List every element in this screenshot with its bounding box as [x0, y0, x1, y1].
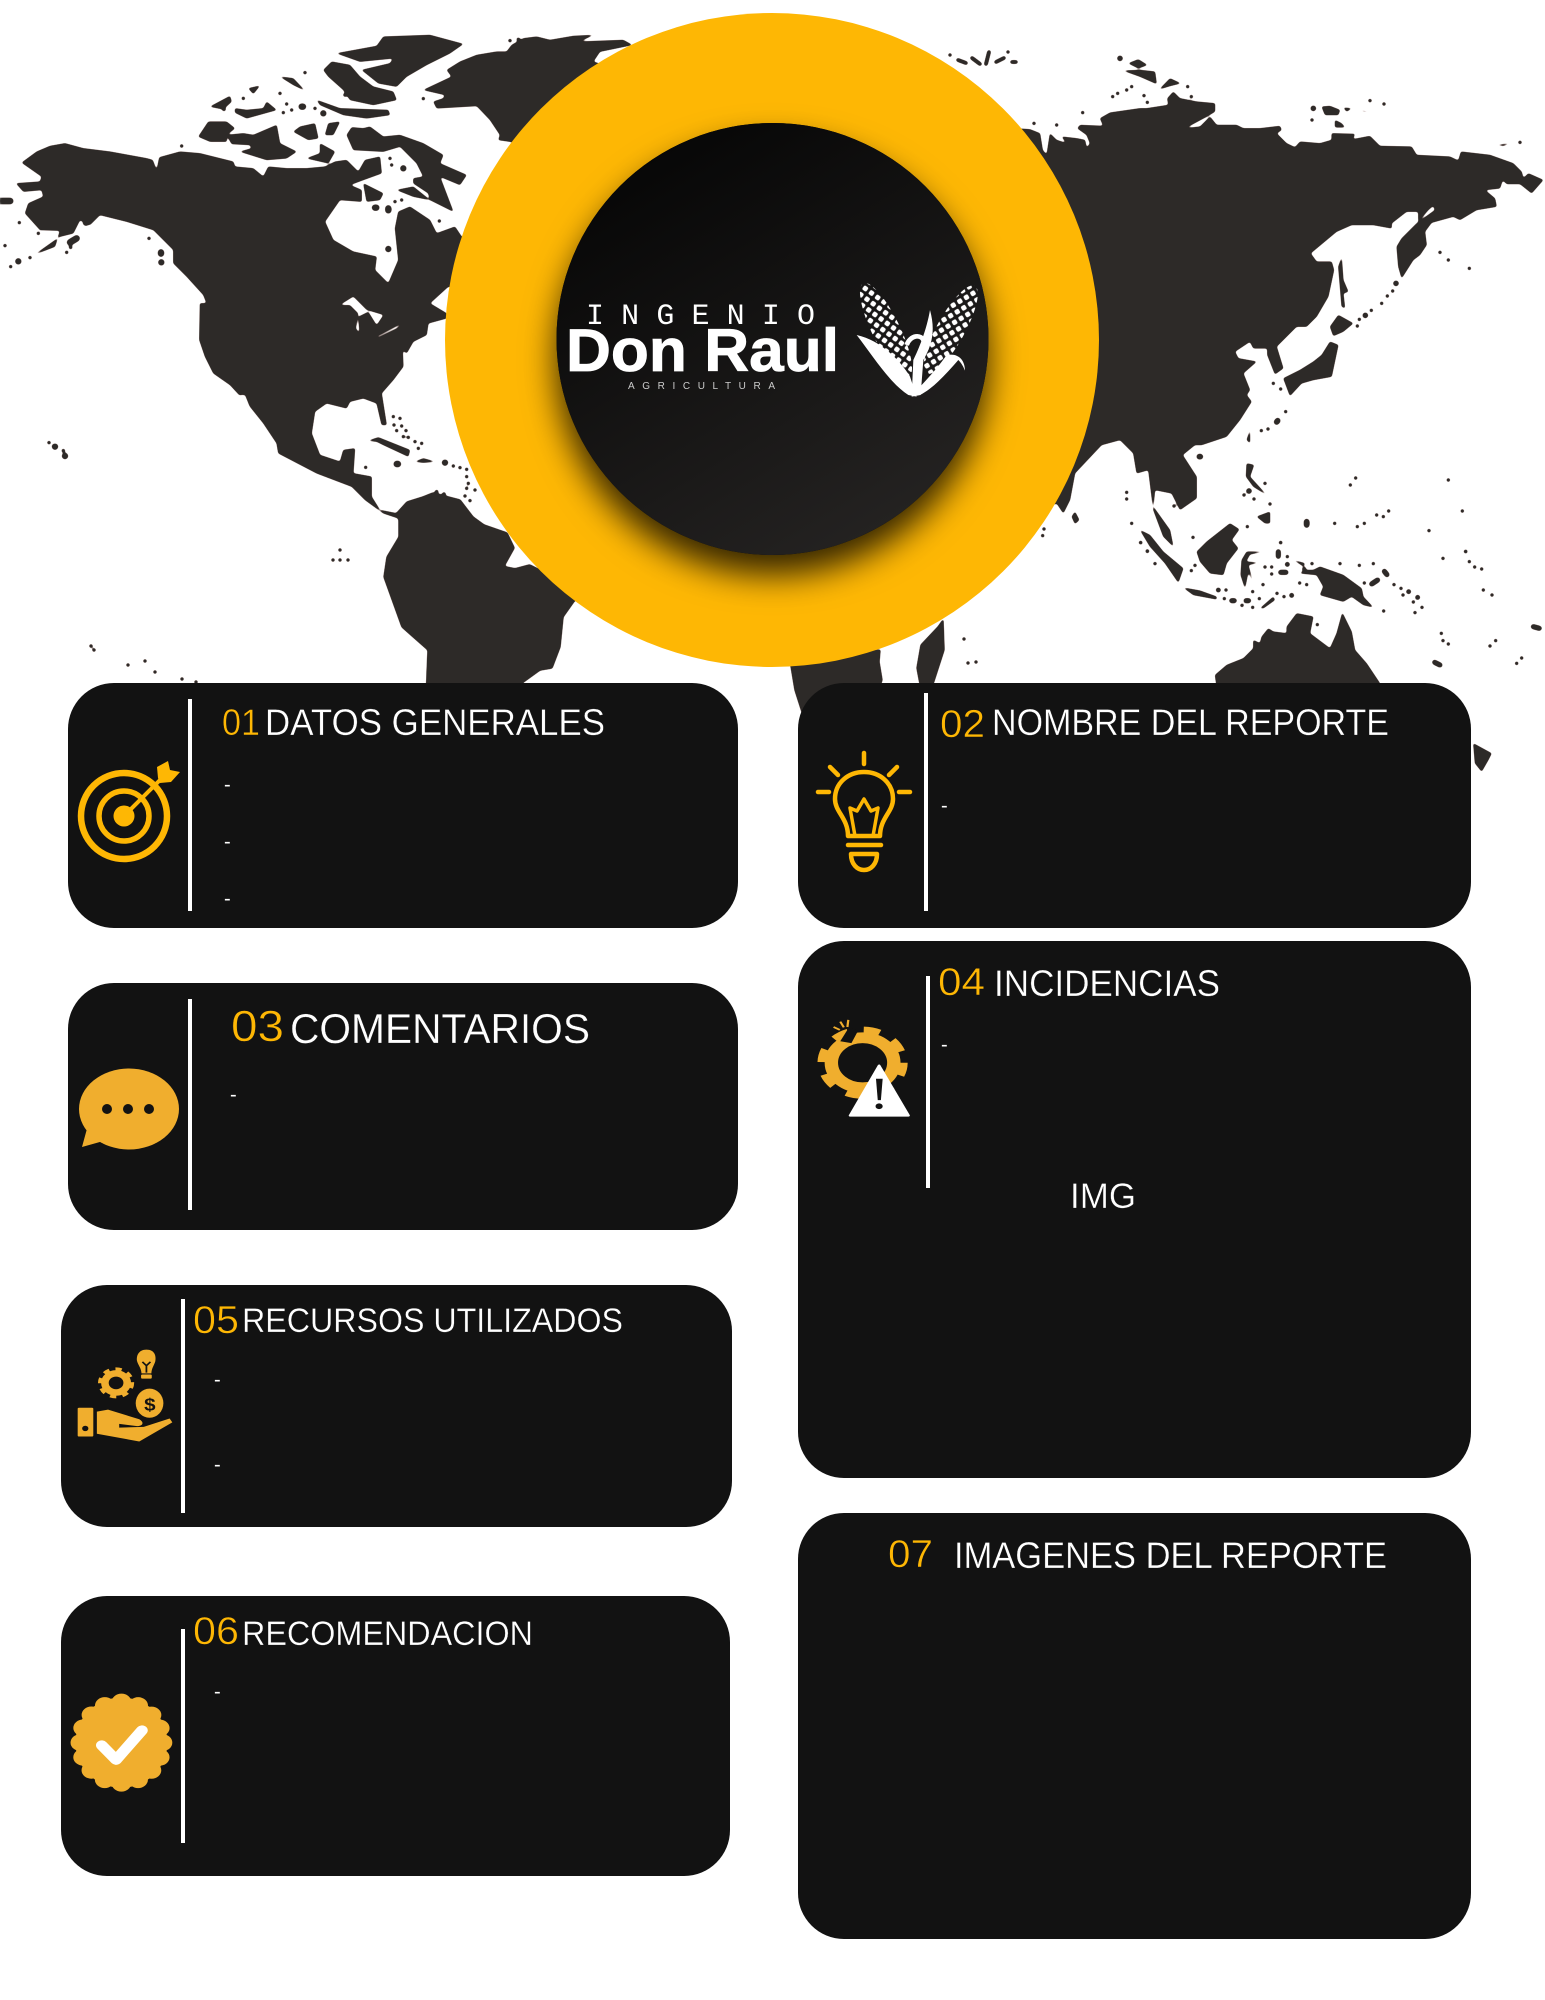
list placeholder: -: [941, 1034, 948, 1056]
list placeholders: -: [214, 1369, 221, 1391]
heading: comentarios: COMENTARIOS: [290, 1005, 590, 1052]
list placeholders: [214, 1369, 221, 1476]
number 01: 01: [222, 702, 260, 743]
heading: imagenes del reporte: IMAGENES DEL REPORTE: [954, 1535, 1387, 1576]
logo: [566, 277, 987, 397]
icon: broken gear with warning: [822, 1020, 909, 1116]
number 05: 05: [193, 1299, 239, 1342]
icon: check badge: [75, 1697, 167, 1788]
panel 07: imagenes del reporte: [798, 1513, 1471, 1939]
icon: light bulb: [818, 753, 910, 870]
logo text: AGRICULTURA: AGRICULTURA: [628, 381, 775, 392]
list placeholders: -: [214, 1454, 221, 1476]
panel 01: datos generales: [68, 683, 738, 928]
number 04: 04: [938, 961, 985, 1004]
map: asia: [897, 58, 1543, 552]
divider: [926, 976, 930, 1188]
number 06: 06: [193, 1610, 239, 1653]
list placeholders: -: [224, 831, 231, 853]
black logo disc: [556, 123, 988, 555]
icon: speech bubble: [79, 1068, 179, 1150]
world map background: [0, 0, 1545, 800]
number 02: 02: [940, 703, 985, 746]
panel 05: recursos utilizados: [61, 1285, 732, 1527]
divider: [188, 999, 192, 1210]
heading: nombre del reporte: NOMBRE DEL REPORTE: [992, 702, 1389, 743]
map: north america and arctic: [2, 35, 650, 518]
map: africa and madagascar: [790, 620, 944, 715]
icon: target with arrow: [81, 761, 180, 859]
panel 06: recomendacion: [61, 1596, 730, 1876]
icon: corn cobs: [851, 277, 987, 397]
panel 02: nombre del reporte: [798, 683, 1471, 928]
list placeholders: [224, 774, 231, 910]
number 03: 03: [231, 1002, 284, 1051]
heading: datos generales: DATOS GENERALES: [265, 702, 605, 743]
list placeholders: -: [224, 888, 231, 910]
yellow circle: [445, 13, 1099, 667]
divider: [181, 1629, 185, 1843]
map: amazon estuary: [505, 548, 530, 568]
list placeholder: -: [214, 1681, 221, 1703]
logo text: Don Raul: Don Raul: [566, 317, 839, 384]
icon: hand with gear, bulb and coin: $: [144, 1396, 156, 1415]
panel 04: incidencias: [798, 941, 1471, 1478]
list placeholder: -: [941, 795, 948, 817]
divider: [924, 693, 928, 911]
number 07: 07: [888, 1533, 933, 1576]
heading: incidencias: INCIDENCIAS: [994, 963, 1220, 1004]
divider: [181, 1299, 185, 1513]
list placeholder: -: [230, 1084, 237, 1106]
divider: [188, 699, 192, 911]
panel 03: comentarios: [68, 983, 738, 1230]
list placeholders: -: [224, 774, 231, 796]
image placeholder label: IMG: [1070, 1177, 1136, 1216]
icon: hand with gear, bulb and coin: [78, 1350, 172, 1441]
map: scattered pacific and atlantic islands: [91, 52, 1016, 682]
map: oceania: [1140, 523, 1539, 772]
heading: recomendacion: RECOMENDACION: [242, 1615, 533, 1653]
heading: recursos utilizados: RECURSOS UTILIZADOS: [242, 1302, 623, 1340]
logo text: INGENIO: INGENIO: [586, 300, 815, 334]
map: south america: [384, 493, 600, 700]
